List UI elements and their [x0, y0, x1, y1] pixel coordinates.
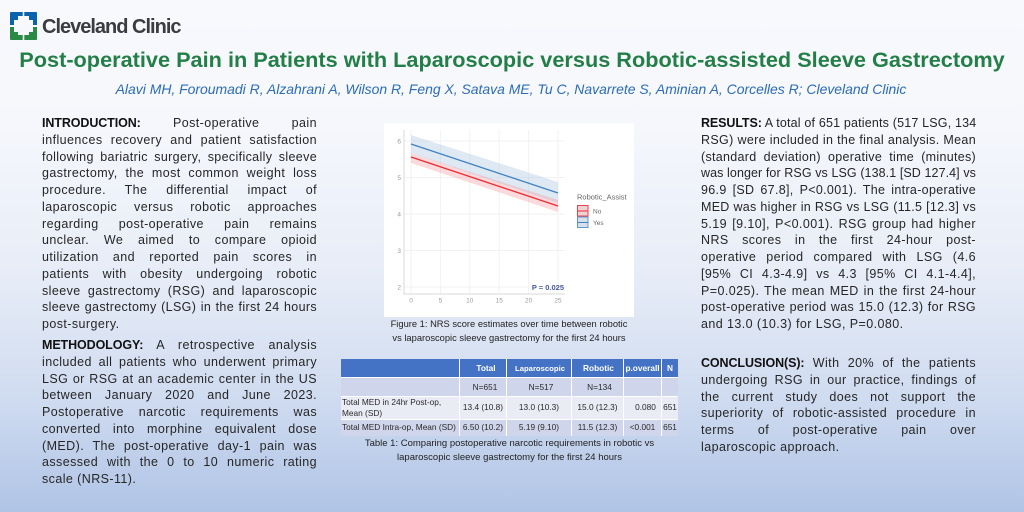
figure caption: vs laparoscopic sleeve gastrectomy for the first 24 hours — [392, 333, 626, 343]
legend: Yes — [593, 220, 604, 227]
panel: results: 5.19 [9.10], P<0.001). RSG group had higher — [701, 216, 976, 230]
authors: Alavi MH, Foroumadi R, Alzahrani A, Wilson R, Feng X, Satava ME, Tu C, Navarrete S, Aminian A, Corcelles R; Cleveland Clinic — [116, 81, 906, 97]
legend: Robotic_Assist — [577, 192, 628, 202]
x axis labels: 25 — [554, 298, 562, 304]
table header row: Robotic — [583, 362, 614, 372]
table caption: Table 1: Comparing postoperative narcotic requirements in robotic vs — [365, 438, 654, 449]
panel: conclusions: the current study does not support the — [701, 390, 976, 404]
table row: 24hr post-op MED: 0.080 — [635, 402, 656, 412]
figure caption — [391, 319, 628, 343]
line: robotic — [411, 144, 558, 193]
table caption — [365, 438, 654, 463]
panel: introduction: sleeve gastrectomy (RSG) and laparoscopic — [42, 284, 317, 298]
x axis labels: 5 — [439, 298, 443, 304]
panel: results: and 13.0 (10.3) for LSG, P=0.080. — [701, 317, 904, 331]
panel: introduction: patients with obesity undergoing robotic — [42, 267, 317, 281]
y axis labels: 2 — [397, 284, 401, 292]
panel: conclusions: terms of post-operative pain over — [701, 423, 976, 437]
table row: sample sizes: N=651 — [473, 382, 497, 392]
table header row: p.overall — [625, 362, 660, 372]
panel: introduction: post-surgery. — [42, 317, 119, 331]
panel: introduction: influences recovery and patient satisfaction — [42, 133, 317, 147]
table row: 24hr post-op MED — [341, 397, 678, 419]
panel: introduction: procedure. The differential impact of — [42, 183, 317, 197]
panel: results — [701, 116, 976, 331]
panel: introduction: gastrectomy, the most common weight loss — [42, 166, 317, 180]
table row: intra-op MED: 651 — [663, 422, 677, 432]
table header row — [341, 359, 678, 377]
panel: conclusions: CONCLUSION(S): With 20% of the patients — [701, 356, 976, 370]
table row: intra-op MED: 11.5 (12.3) — [578, 422, 617, 432]
table row: 24hr post-op MED: 651 — [663, 402, 677, 412]
panel: introduction: following bariatric surgery, specifically sleeve — [42, 150, 317, 164]
table row: intra-op MED: <0.001 — [630, 422, 655, 432]
table row: 24hr post-op MED: 13.0 (10.3) — [519, 402, 559, 412]
panel: conclusions — [701, 356, 976, 454]
band: laparoscopic confidence interval — [411, 153, 558, 212]
table row: 24hr post-op MED: 15.0 (12.3) — [577, 402, 618, 412]
panel: conclusions: superiority of robotic-assisted procedure in — [701, 406, 976, 420]
panel: results: (standard deviation) operative time (minutes) — [701, 150, 976, 164]
y axis labels: 6 — [397, 138, 401, 146]
panel: introduction: utilization and reported pain scores in — [42, 250, 317, 264]
table row: intra-op MED: 5.19 (9.10) — [519, 422, 559, 432]
panel: results: RSG) were included in the final analysis. Mean — [701, 133, 976, 147]
panel: results: 96.9 [SD 67.8], P<0.001). The intra-operative — [701, 183, 976, 197]
table row: 24hr post-op MED: 13.4 (10.8) — [463, 402, 503, 412]
panel: results: operative period compared with LSG (4.6 — [701, 250, 976, 264]
table header row: N — [667, 362, 673, 372]
panel: methodology: Postoperative narcotic requirements was — [42, 405, 317, 419]
table row: sample sizes — [341, 378, 678, 396]
chart: NRS score estimates over time — [384, 123, 634, 317]
table header row: Total — [476, 362, 496, 372]
x axis labels: 20 — [525, 298, 533, 304]
axes — [404, 130, 565, 294]
panel: introduction: sleeve gastrectomy (LSG) in the first 24 hours — [42, 300, 317, 314]
table row: 24hr post-op MED: Mean (SD) — [342, 408, 382, 418]
x axis labels: 15 — [496, 298, 503, 304]
legend — [577, 192, 628, 228]
table row: intra-op MED: 6.50 (10.2) — [463, 422, 503, 432]
panel: methodology: included all patients who underwent primary — [42, 355, 317, 369]
panel: results: MED was higher in RSG vs LSG (11.5 [12.3] vs — [701, 200, 976, 214]
panel: results: post-operative period was 15.0 (12.3) for RSG — [701, 300, 976, 314]
x axis labels: 0 — [409, 298, 413, 304]
panel: introduction: laparoscopic versus robotic approaches — [42, 200, 317, 214]
panel: methodology: (MED). The post-operative day-1 pain was — [42, 438, 317, 452]
table row: 24hr post-op MED: Total MED in 24hr Post-op, — [342, 397, 441, 407]
panel: methodology — [42, 338, 317, 486]
x axis labels: 10 — [466, 298, 474, 304]
panel: introduction: INTRODUCTION: Post-operative pain — [42, 116, 317, 130]
icon: Cleveland Clinic mark — [10, 12, 37, 40]
panel: methodology: assessed with the 0 to 10 numeric rating — [42, 455, 317, 469]
panel: results: NRS scores in the first 24-hour post- — [701, 233, 976, 247]
panel: methodology: METHODOLOGY: A retrospective analysis — [42, 338, 317, 352]
p value: P = 0.025 — [532, 283, 564, 292]
legend: No — [593, 208, 602, 216]
panel: introduction: unclear. We aimed to compare opioid — [42, 233, 317, 247]
y axis labels: 4 — [397, 212, 401, 218]
x axis labels — [409, 298, 562, 304]
panel: results: [95% CI 4.3-4.9] vs 4.3 [95% CI 4.1-4.4], — [701, 267, 976, 281]
table row: intra-op MED: Total MED Intra-op, Mean (SD) — [342, 422, 456, 432]
panel: methodology: scale (NRS-11). — [42, 472, 136, 486]
line: laparoscopic — [411, 157, 558, 206]
panel: methodology: LSG or RSG at an academic center in the US — [42, 372, 317, 386]
figure caption: Figure 1: NRS score estimates over time between robotic — [391, 319, 627, 329]
panel: introduction — [42, 116, 317, 331]
title: Post-operative Pain in Patients with Laparoscopic versus Robotic-assisted Sleeve Gastrectomy — [19, 47, 1005, 72]
logo: Cleveland Clinic — [10, 12, 181, 40]
table row: sample sizes: N=134 — [587, 382, 612, 392]
y axis labels: 5 — [397, 175, 401, 182]
panel: methodology: converted into morphine equivalent dose — [42, 422, 317, 436]
table row: sample sizes: N=517 — [529, 382, 553, 392]
logo wordmark: Cleveland Clinic — [42, 16, 180, 38]
panel: methodology: between January 2020 and June 2023. — [42, 388, 317, 402]
table row: intra-op MED — [341, 420, 678, 436]
y axis labels: 3 — [397, 248, 401, 255]
table: narcotic requirements — [341, 359, 678, 436]
panel: conclusions: undergoing RSG in our practice, findings of — [701, 373, 976, 387]
panel: results: RESULTS: A total of 651 patients (517 LSG, 134 — [701, 116, 976, 130]
panel: introduction: regarding post-operative pain remains — [42, 216, 317, 230]
table caption: laparoscopic sleeve gastrectomy for the first 24 hours — [397, 452, 622, 463]
panel: results: was longer for RSG vs LSG (138.1 [SD 127.4] vs — [701, 166, 976, 180]
panel: conclusions: laparoscopic approach. — [701, 440, 840, 454]
table header row: Laparoscopic — [515, 364, 565, 372]
panel: results: P=0.025). The mean MED in the first 24-hour — [701, 284, 976, 298]
y axis labels — [397, 138, 401, 292]
band: robotic confidence interval — [411, 135, 558, 203]
